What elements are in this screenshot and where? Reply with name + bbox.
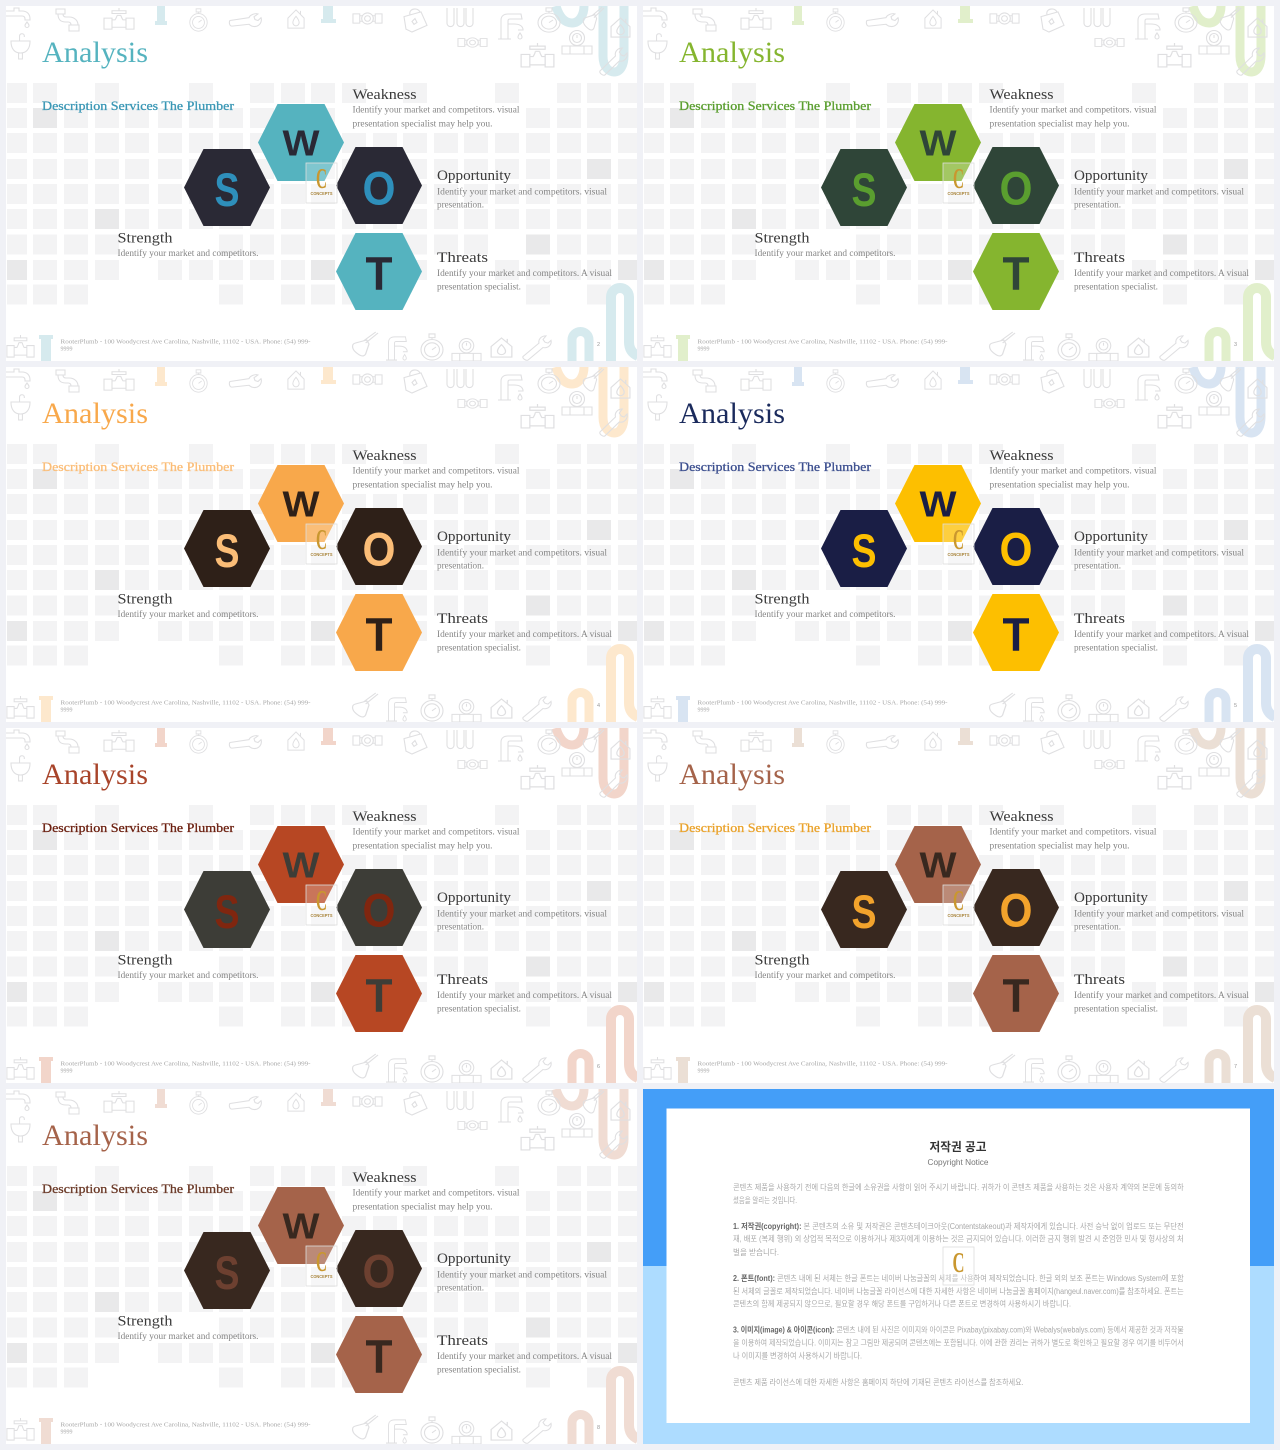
notice heading: 저작권 공고 bbox=[930, 1139, 986, 1154]
title: Analysis bbox=[679, 758, 785, 791]
strength text: Strength bbox=[118, 952, 173, 968]
notice body text: 1. 저작권(copyright): 본 콘텐츠의 소유 및 저작권은 콘텐츠테이크아웃(Contentstakeout)과 제작자에게 있습니다. 사전 승낙 없이 업로드 또는 무단전 bbox=[733, 1221, 1184, 1231]
threats text: Threats bbox=[1074, 972, 1125, 988]
footer address: 9999 bbox=[60, 1429, 72, 1436]
hexagon O: O bbox=[362, 1244, 396, 1298]
strength text: Identify your market and competitors. bbox=[754, 248, 896, 258]
threats text bbox=[437, 1333, 613, 1375]
strength text: Identify your market and competitors. bbox=[754, 609, 896, 619]
hexagon S: S bbox=[852, 524, 876, 577]
footer address: 9999 bbox=[698, 346, 710, 353]
threats text: Threats bbox=[437, 611, 488, 627]
footer address: RooterPlumb - 100 Woodycrest Ave Carolina, Nashville, 11102 - USA. Phone: (54) 999- bbox=[698, 338, 948, 346]
opportunity text: presentation. bbox=[1074, 561, 1121, 571]
strength text bbox=[754, 952, 896, 980]
threats text: Identify your market and competitors. A visual bbox=[1074, 990, 1250, 1000]
notice body text: 셨음을 알리는 것입니다. bbox=[733, 1195, 797, 1205]
footer address bbox=[698, 338, 948, 353]
hexagon W: W bbox=[282, 1206, 320, 1246]
notice body text: 나 이미지를 변경하여 사용하시기 바랍니다. bbox=[733, 1350, 862, 1360]
weakness text: Identify your market and competitors. visual bbox=[352, 826, 520, 836]
watermark logo: C bbox=[953, 164, 964, 195]
hexagon T: T bbox=[366, 1330, 393, 1383]
opportunity text: Opportunity bbox=[1074, 890, 1148, 906]
footer address: 9999 bbox=[60, 707, 72, 714]
hexagon S: S bbox=[852, 885, 876, 938]
footer address: 9999 bbox=[698, 707, 710, 714]
opportunity text: presentation. bbox=[1074, 200, 1121, 210]
hexagon W bbox=[895, 826, 981, 903]
watermark logo: C bbox=[316, 525, 327, 556]
hexagon S: S bbox=[214, 1246, 240, 1299]
opportunity text: presentation. bbox=[437, 200, 484, 210]
hexagon O: O bbox=[362, 522, 396, 576]
notice body text: 을 이용하여 제작되었습니다. 이미지는 참고 그림만 제공되며 콘텐츠에는 포함됩니다. 이에 관한 권리는 귀하가 별도로 확인하고 필요할 경우 여기를 비두어서 bbox=[733, 1338, 1184, 1348]
watermark logo bbox=[306, 1246, 337, 1286]
title: Analysis bbox=[679, 36, 785, 69]
slide background with grid and plumbing icons bbox=[643, 6, 1275, 362]
threats text bbox=[437, 611, 613, 653]
hexagon S bbox=[821, 149, 907, 226]
opportunity text bbox=[1074, 529, 1245, 571]
watermark logo: CONCEPTS bbox=[948, 191, 970, 196]
opportunity text: Identify your market and competitors. visual bbox=[437, 186, 608, 196]
strength text: Strength bbox=[118, 1314, 173, 1330]
slide background with grid and plumbing icons bbox=[643, 367, 1275, 723]
subtitle: Description Services The Plumber bbox=[42, 820, 235, 835]
hexagon S: S bbox=[214, 163, 240, 216]
opportunity text: Identify your market and competitors. visual bbox=[1074, 186, 1245, 196]
hexagon O bbox=[336, 1230, 422, 1307]
panel: slide 6 brown and amber SWOT bbox=[643, 728, 1275, 1084]
hexagon W bbox=[895, 465, 981, 542]
footer address bbox=[698, 700, 948, 714]
weakness text: Weakness bbox=[352, 1170, 417, 1186]
threats text: presentation specialist. bbox=[1074, 282, 1158, 292]
opportunity text: Opportunity bbox=[437, 1251, 511, 1267]
page number: 6 bbox=[597, 1064, 600, 1070]
page number: 5 bbox=[1234, 703, 1237, 709]
hexagon W bbox=[258, 104, 344, 181]
weakness text bbox=[352, 87, 520, 128]
slide background with grid and plumbing icons bbox=[6, 6, 638, 362]
slide background with grid and plumbing icons bbox=[6, 728, 638, 1084]
strength text: Identify your market and competitors. bbox=[118, 248, 258, 258]
strength text bbox=[118, 230, 258, 258]
hexagon O: O bbox=[1000, 522, 1032, 576]
page number: 4 bbox=[597, 703, 600, 709]
subtitle: Description Services The Plumber bbox=[42, 459, 235, 474]
hexagon S bbox=[184, 149, 270, 226]
weakness text bbox=[990, 448, 1157, 490]
hexagon T: T bbox=[366, 247, 393, 300]
footer address bbox=[698, 1060, 948, 1075]
footer address bbox=[60, 338, 310, 353]
hexagon T bbox=[973, 955, 1059, 1032]
threats text: presentation specialist. bbox=[437, 1365, 521, 1375]
opportunity text bbox=[437, 168, 608, 210]
hexagon W: W bbox=[920, 484, 957, 524]
page number: 3 bbox=[1234, 342, 1237, 348]
threats text: Identify your market and competitors. A visual bbox=[437, 629, 613, 639]
notice body text: 된 서체의 글꼴로 제작되었습니다. 네이버 나눔글꼴 라이선스에 대한 자세한 사항은 네이버 나눔글꼴 홈페이지(hangeul.naver.com)를 참조하세요. 폰트는 bbox=[733, 1286, 1184, 1296]
threats text: Identify your market and competitors. A visual bbox=[437, 1351, 613, 1361]
weakness text: Weakness bbox=[990, 809, 1054, 825]
watermark logo: CONCEPTS bbox=[310, 552, 332, 557]
title: Analysis bbox=[42, 397, 148, 430]
hexagon S bbox=[184, 510, 270, 587]
white notice card bbox=[666, 1108, 1250, 1423]
threats text: Threats bbox=[1074, 250, 1125, 266]
hexagon S: S bbox=[214, 885, 240, 938]
hexagon W: W bbox=[282, 484, 320, 524]
footer address bbox=[60, 1422, 310, 1436]
hexagon T bbox=[973, 594, 1059, 671]
threats text: Identify your market and competitors. A visual bbox=[1074, 268, 1250, 278]
footer address: RooterPlumb - 100 Woodycrest Ave Carolina, Nashville, 11102 - USA. Phone: (54) 999- bbox=[60, 700, 310, 706]
threats text: Identify your market and competitors. A visual bbox=[1074, 629, 1250, 639]
hexagon T bbox=[973, 233, 1059, 310]
panel: slide 7 brown SWOT bbox=[6, 1089, 638, 1445]
threats text bbox=[437, 250, 613, 292]
strength text: Strength bbox=[754, 952, 810, 968]
weakness text: Identify your market and competitors. visual bbox=[352, 104, 520, 114]
strength text: Identify your market and competitors. bbox=[754, 970, 896, 980]
weakness text: presentation specialist may help you. bbox=[352, 480, 492, 490]
hexagon T bbox=[336, 594, 422, 671]
hexagon O bbox=[973, 869, 1059, 946]
opportunity text bbox=[437, 529, 608, 571]
opportunity text: Opportunity bbox=[437, 890, 511, 906]
hexagon W bbox=[258, 1187, 344, 1264]
strength text: Strength bbox=[118, 592, 173, 608]
watermark logo bbox=[943, 885, 974, 925]
hexagon O bbox=[973, 508, 1059, 585]
title: Analysis bbox=[42, 1119, 148, 1152]
threats text bbox=[1074, 250, 1250, 292]
strength text bbox=[118, 592, 258, 619]
weakness text bbox=[352, 1170, 520, 1212]
watermark logo: C bbox=[316, 1247, 327, 1278]
watermark logo bbox=[306, 885, 337, 925]
subtitle: Description Services The Plumber bbox=[42, 98, 235, 113]
hexagon S bbox=[821, 871, 907, 948]
title: Analysis bbox=[42, 758, 148, 791]
weakness text: presentation specialist may help you. bbox=[990, 118, 1130, 128]
opportunity text bbox=[1074, 168, 1245, 210]
threats text: presentation specialist. bbox=[1074, 1004, 1158, 1014]
hexagon O: O bbox=[1000, 884, 1032, 936]
slide background with grid and plumbing icons bbox=[6, 1089, 638, 1445]
hexagon W: W bbox=[920, 844, 957, 886]
hexagon T bbox=[336, 1316, 422, 1393]
page number: 7 bbox=[1234, 1064, 1237, 1070]
watermark logo: CONCEPTS bbox=[948, 913, 970, 918]
opportunity text: Opportunity bbox=[437, 529, 511, 545]
weakness text bbox=[990, 809, 1157, 850]
subtitle: Description Services The Plumber bbox=[679, 459, 872, 474]
strength text: Strength bbox=[754, 230, 810, 246]
hexagon T: T bbox=[1002, 969, 1030, 1022]
panel: slide 2 green SWOT bbox=[643, 6, 1275, 362]
weakness text: Weakness bbox=[352, 809, 417, 825]
strength text: Identify your market and competitors. bbox=[118, 1331, 258, 1341]
opportunity text: Identify your market and competitors. visual bbox=[1074, 548, 1245, 558]
title: Analysis bbox=[42, 36, 148, 69]
watermark logo bbox=[306, 163, 337, 203]
opportunity text: presentation. bbox=[437, 561, 484, 571]
threats text: presentation specialist. bbox=[437, 1004, 521, 1014]
watermark logo: C bbox=[316, 886, 327, 917]
watermark logo bbox=[943, 1247, 974, 1285]
watermark logo: CONCEPTS bbox=[948, 552, 970, 557]
watermark logo: CONCEPTS bbox=[310, 191, 332, 196]
hexagon O bbox=[336, 508, 422, 585]
footer address: RooterPlumb - 100 Woodycrest Ave Carolina, Nashville, 11102 - USA. Phone: (54) 999- bbox=[60, 338, 310, 346]
hexagon W: W bbox=[282, 122, 320, 164]
threats text bbox=[1074, 972, 1250, 1014]
hexagon T bbox=[336, 233, 422, 310]
footer address: 9999 bbox=[60, 1068, 72, 1075]
threats text: Threats bbox=[437, 1333, 488, 1349]
strength text: Strength bbox=[118, 230, 173, 246]
opportunity text: Identify your market and competitors. visual bbox=[1074, 908, 1245, 918]
footer address: 9999 bbox=[60, 346, 72, 353]
panel: copyright notice slide bbox=[643, 1089, 1274, 1444]
hexagon S bbox=[821, 510, 907, 587]
strength text bbox=[754, 592, 896, 619]
strength text: Identify your market and competitors. bbox=[118, 609, 258, 619]
hexagon O: O bbox=[362, 884, 396, 936]
subtitle: Description Services The Plumber bbox=[679, 820, 872, 835]
footer address: RooterPlumb - 100 Woodycrest Ave Carolina, Nashville, 11102 - USA. Phone: (54) 999- bbox=[698, 1060, 948, 1068]
title: Analysis bbox=[679, 397, 785, 430]
notice body text: 재, 배포 (복제 행위) 외 상업적 목적으로 이용하거나 제3자에게 이용하는 것은 금지되어 있습니다. 이러한 금지 행위 발견 시 준엄한 민사 및 형사상의 처 bbox=[733, 1234, 1184, 1244]
watermark logo bbox=[306, 524, 337, 564]
hexagon W bbox=[895, 104, 981, 181]
footer address: RooterPlumb - 100 Woodycrest Ave Carolina, Nashville, 11102 - USA. Phone: (54) 999- bbox=[60, 1422, 310, 1428]
notice body text: 콘텐츠 제품 라이선스에 대한 자세한 사항은 홈페이지 하단에 기재된 콘텐츠 라이선스를 참조하세요. bbox=[733, 1377, 1024, 1387]
opportunity text: Identify your market and competitors. visual bbox=[437, 1270, 608, 1280]
threats text: presentation specialist. bbox=[437, 643, 521, 653]
weakness text bbox=[352, 448, 520, 490]
strength text bbox=[754, 230, 896, 258]
threats text: Identify your market and competitors. A visual bbox=[437, 268, 613, 278]
strength text: Strength bbox=[754, 592, 810, 608]
threats text: presentation specialist. bbox=[437, 282, 521, 292]
hexagon S: S bbox=[214, 524, 240, 577]
opportunity text bbox=[437, 1251, 608, 1293]
page number: 2 bbox=[597, 342, 600, 348]
watermark logo bbox=[943, 163, 974, 203]
hexagon W bbox=[258, 465, 344, 542]
weakness text bbox=[990, 87, 1157, 128]
subtitle: Description Services The Plumber bbox=[42, 1181, 235, 1196]
hexagon O bbox=[336, 869, 422, 946]
weakness text: Identify your market and competitors. visual bbox=[990, 104, 1157, 114]
page number: 8 bbox=[597, 1425, 600, 1431]
slide background with grid and plumbing icons bbox=[643, 728, 1275, 1084]
weakness text: Weakness bbox=[352, 448, 417, 464]
notice body text: 2. 폰트(font): 콘텐츠 내에 된 서체는 한글 폰트는 네이버 나눔글꼴의 서체를 사용하여 제작되었습니다. 한글 외의 보조 폰트는 Windows System에 포함 bbox=[733, 1273, 1184, 1283]
hexagon O bbox=[336, 147, 422, 224]
weakness text: Weakness bbox=[990, 87, 1054, 103]
hexagon T bbox=[336, 955, 422, 1032]
two-tone blue background bbox=[643, 1089, 1274, 1444]
strength text: Identify your market and competitors. bbox=[118, 970, 258, 980]
opportunity text: presentation. bbox=[1074, 922, 1121, 932]
watermark logo: C bbox=[953, 525, 964, 556]
strength text bbox=[118, 1314, 258, 1341]
weakness text: presentation specialist may help you. bbox=[352, 840, 492, 850]
weakness text: Weakness bbox=[990, 448, 1054, 464]
strength text bbox=[118, 952, 258, 980]
hexagon W: W bbox=[920, 122, 957, 164]
hexagon T: T bbox=[1002, 608, 1030, 661]
opportunity text: Identify your market and competitors. visual bbox=[437, 548, 608, 558]
weakness text: Identify your market and competitors. visual bbox=[990, 826, 1157, 836]
threats text: Threats bbox=[437, 250, 488, 266]
weakness text: Identify your market and competitors. visual bbox=[990, 466, 1157, 476]
weakness text: Identify your market and competitors. visual bbox=[352, 1188, 520, 1198]
notice body text: 콘텐츠 제품을 사용하기 전에 다음의 한글에 소유권을 사항이 읽어 주시기 바랍니다. 귀하가 이 콘텐츠 제품을 사용하는 것은 사용자 계약의 본문에 동의하 bbox=[733, 1182, 1184, 1192]
watermark logo: C bbox=[953, 886, 964, 917]
footer address bbox=[60, 1060, 310, 1075]
hexagon W bbox=[258, 826, 344, 903]
hexagon T: T bbox=[1002, 247, 1030, 300]
weakness text: presentation specialist may help you. bbox=[352, 118, 492, 128]
notice body text bbox=[733, 1182, 1184, 1387]
hexagon W: W bbox=[282, 844, 320, 886]
opportunity text bbox=[1074, 890, 1245, 932]
threats text: presentation specialist. bbox=[1074, 643, 1158, 653]
weakness text: presentation specialist may help you. bbox=[990, 840, 1130, 850]
footer address: 9999 bbox=[698, 1068, 710, 1075]
opportunity text: presentation. bbox=[437, 922, 484, 932]
opportunity text bbox=[437, 890, 608, 932]
notice subheading: Copyright Notice bbox=[928, 1158, 989, 1167]
opportunity text: Opportunity bbox=[1074, 168, 1148, 184]
hexagon S: S bbox=[852, 163, 876, 216]
weakness text bbox=[352, 809, 520, 850]
watermark logo: C bbox=[952, 1247, 964, 1279]
slide background with grid and plumbing icons bbox=[6, 367, 638, 723]
subtitle: Description Services The Plumber bbox=[679, 98, 872, 113]
watermark logo bbox=[943, 524, 974, 564]
notice body text: 콘텐츠의 함께 제공되지 않으므로, 필요할 경우 해당 폰트를 구입하거나 다른 폰트로 변경하여 사용하시기 바랍니다. bbox=[733, 1298, 1071, 1308]
weakness text: Weakness bbox=[352, 87, 417, 103]
notice body text: 벌을 받습니다. bbox=[733, 1247, 779, 1257]
weakness text: presentation specialist may help you. bbox=[352, 1202, 492, 1212]
footer address: RooterPlumb - 100 Woodycrest Ave Carolina, Nashville, 11102 - USA. Phone: (54) 999- bbox=[698, 700, 948, 706]
hexagon O: O bbox=[362, 162, 396, 214]
hexagon S bbox=[184, 871, 270, 948]
panel: slide 5 rust SWOT bbox=[6, 728, 638, 1084]
threats text bbox=[1074, 611, 1250, 653]
watermark logo: CONCEPTS bbox=[310, 1274, 332, 1279]
threats text: Identify your market and competitors. A visual bbox=[437, 990, 613, 1000]
threats text bbox=[437, 972, 613, 1014]
panel: slide 4 navy and yellow SWOT bbox=[643, 367, 1275, 723]
opportunity text: Opportunity bbox=[1074, 529, 1148, 545]
notice body text: 3. 이미지(image) & 아이콘(icon): 콘텐츠 내에 된 사진은 이미지와 아이콘은 Pixabay(pixabay.com)와 Webalys(webalys.com) 등에서 제공한 것과 저작물 bbox=[733, 1324, 1184, 1334]
weakness text: Identify your market and competitors. visual bbox=[352, 466, 520, 476]
hexagon O bbox=[973, 147, 1059, 224]
opportunity text: presentation. bbox=[437, 1283, 484, 1293]
hexagon O: O bbox=[1000, 162, 1032, 214]
weakness text: presentation specialist may help you. bbox=[990, 480, 1130, 490]
watermark logo: CONCEPTS bbox=[310, 913, 332, 918]
footer address: RooterPlumb - 100 Woodycrest Ave Carolina, Nashville, 11102 - USA. Phone: (54) 999- bbox=[60, 1060, 310, 1068]
panel: slide 1 teal SWOT bbox=[6, 6, 638, 362]
footer address bbox=[60, 700, 310, 714]
watermark logo: C bbox=[316, 164, 327, 195]
hexagon T: T bbox=[366, 969, 393, 1022]
threats text: Threats bbox=[437, 972, 488, 988]
opportunity text: Identify your market and competitors. visual bbox=[437, 908, 608, 918]
hexagon S bbox=[184, 1232, 270, 1309]
opportunity text: Opportunity bbox=[437, 168, 511, 184]
hexagon T: T bbox=[366, 608, 393, 661]
threats text: Threats bbox=[1074, 611, 1125, 627]
panel: slide 3 orange SWOT bbox=[6, 367, 638, 723]
